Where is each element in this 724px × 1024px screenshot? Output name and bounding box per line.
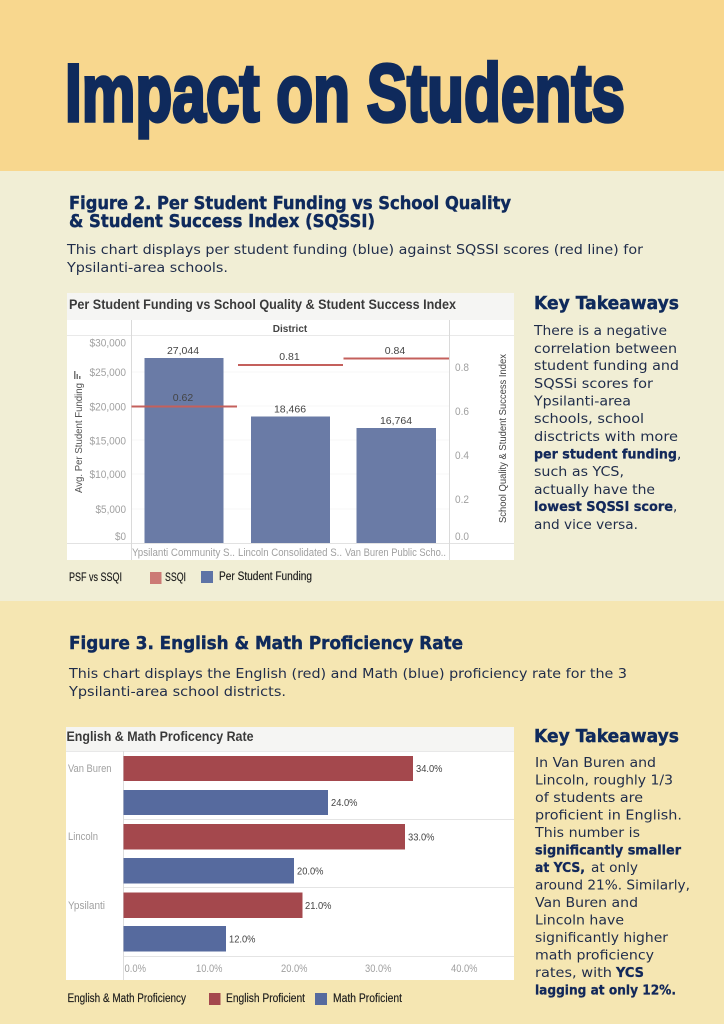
legend: figure 2: SSQI [165, 572, 186, 584]
text block: takeaways figure 2: , [673, 499, 677, 515]
right axis ticks: 0.4 [455, 450, 469, 462]
text block: takeaways figure 3: Lincoln have [535, 912, 624, 928]
text block: takeaways figure 3: In Van Buren and [535, 755, 656, 771]
legend: figure 3: English & Math Proficiency [68, 993, 186, 1005]
axis ticks: 10.0% [196, 963, 223, 975]
left axis ticks: $20,000 [90, 402, 126, 414]
heading: key takeaways figure 2: Key Takeaways [534, 293, 679, 314]
English bars [124, 756, 413, 918]
text block: takeaways figure 3: Lincoln, roughly 1/3 [535, 772, 673, 788]
text block: takeaways figure 3: proficient in English. [535, 808, 682, 824]
legend: figure 2: Per Student Funding [219, 571, 312, 583]
right axis ticks: 0.8 [455, 362, 469, 374]
right axis ticks: 0.2 [455, 494, 469, 506]
category labels: Van Buren Public Scho.. [345, 547, 446, 559]
bar chart: per student funding vs SQSSI [67, 293, 514, 560]
text block: takeaways figure 2 [533, 323, 681, 533]
text block: takeaways figure 2: correlation between [534, 341, 677, 357]
text block: takeaways figure 2: and vice versa. [534, 517, 638, 533]
text block: takeaways figure 3: YCS [615, 965, 644, 981]
bar chart: english and math proficiency [66, 727, 514, 980]
text block: takeaways figure 3: of students are [535, 790, 643, 806]
text block: takeaways figure 2: such as YCS, [534, 464, 624, 480]
text block: takeaways figure 3: lagging at only 12%. [535, 982, 676, 998]
text block: takeaways figure 2: Ypsilanti-area [533, 394, 631, 410]
text block: figure 3 description: This chart displays the English (red) and Math (blue) proficiency rate for the 3 [68, 666, 627, 682]
left axis ticks: $25,000 [90, 367, 126, 379]
right axis ticks: 0.0 [455, 531, 469, 543]
chart title: English & Math Proficency Rate [66, 729, 254, 744]
panel: figure 3 background [0, 601, 724, 1024]
axis title: left: Avg. Per Student Funding [73, 383, 85, 493]
text block: takeaways figure 2: disctricts with more [534, 429, 678, 445]
district labels [68, 763, 112, 912]
category labels [132, 547, 446, 559]
legend: figure 3: English Proficient [226, 993, 306, 1005]
value labels: 20.0% [297, 866, 324, 878]
axis ticks: 40.0% [451, 963, 478, 975]
text block: takeaways figure 3: math proficiency [535, 948, 654, 964]
left axis ticks: $0 [115, 531, 126, 543]
legend: figure 2: PSF vs SSQI [69, 572, 122, 584]
text block: takeaways figure 3: rates, with [535, 965, 612, 981]
text block: figure 2 description: Ypsilanti-area schools. [66, 260, 228, 276]
text block: takeaways figure 2: schools, school [534, 411, 644, 427]
data labels: 0.62 [173, 392, 193, 404]
right axis ticks [455, 362, 469, 543]
data labels: 18,466 [274, 404, 306, 416]
data labels: 27,044 [167, 345, 199, 357]
chart title: Per Student Funding vs School Quality & Student Success Index [69, 297, 456, 312]
left axis ticks: $30,000 [90, 338, 126, 350]
text block: takeaways figure 2: lowest SQSSI score [534, 499, 673, 515]
district labels: Ypsilanti [68, 900, 105, 912]
left axis ticks: $15,000 [90, 436, 126, 448]
text block: takeaways figure 3: at only [591, 860, 638, 876]
heading: figure 3: Figure 3. English & Math Proficiency Rate [69, 634, 463, 654]
value labels: 12.0% [229, 934, 256, 946]
column header: District [273, 324, 308, 335]
axis ticks: 20.0% [281, 963, 308, 975]
category labels: Ypsilanti Community S.. [132, 547, 235, 559]
Math bars [124, 790, 328, 952]
value labels: 24.0% [331, 797, 358, 809]
axis ticks: 0.0% [124, 963, 146, 975]
text block: takeaways figure 3: around 21%. Similarly, [535, 878, 690, 894]
axis ticks [124, 963, 478, 975]
text block: takeaways figure 2: , [677, 446, 681, 462]
value labels: 34.0% [416, 763, 442, 775]
text block: figure 3 description [68, 666, 627, 700]
data labels: 16,764 [380, 415, 412, 427]
legend: figure 2 [69, 571, 312, 584]
legend: figure 3 [68, 993, 403, 1005]
heading: figure 2: & Student Success Index (SQSSI) [69, 212, 375, 232]
text block: takeaways figure 3: Van Buren and [535, 895, 638, 911]
text block: takeaways figure 3: at YCS, [535, 860, 585, 876]
text block: takeaways figure 3 [534, 755, 690, 998]
text block: figure 2 description: This chart displays per student funding (blue) against SQSSI scores (red line) for [66, 242, 643, 258]
text block: figure 2 description [66, 242, 643, 276]
text block: takeaways figure 3: significantly smaller [535, 842, 681, 858]
text block: takeaways figure 2: There is a negative [533, 323, 667, 339]
text block: takeaways figure 2: student funding and [534, 358, 679, 374]
text block: takeaways figure 2: actually have the [534, 482, 655, 498]
axis title: right: School Quality & Student Success Index [497, 353, 509, 523]
SSQI lines [132, 358, 449, 406]
district labels: Van Buren [68, 763, 112, 775]
text block: takeaways figure 3: This number is [534, 825, 640, 841]
text block: figure 3 description: Ypsilanti-area school districts. [68, 684, 286, 700]
axis ticks: 30.0% [365, 963, 392, 975]
data labels: 0.81 [279, 351, 300, 363]
text block: takeaways figure 3: significantly higher [535, 930, 668, 946]
heading: figure 2 [69, 194, 512, 232]
district labels: Lincoln [68, 831, 98, 843]
data labels [167, 345, 412, 427]
category labels: Lincoln Consolidated S.. [238, 547, 342, 559]
left axis ticks: $5,000 [96, 504, 126, 516]
panel: title banner [0, 0, 724, 171]
right axis ticks: 0.6 [455, 406, 469, 418]
icon: sort indicator [74, 371, 80, 379]
bars [144, 358, 436, 543]
value labels: 33.0% [408, 832, 434, 844]
value labels [229, 763, 442, 946]
heading: key takeaways figure 3: Key Takeaways [534, 726, 679, 747]
legend: figure 3: Math Proficient [333, 993, 403, 1005]
left axis ticks: $10,000 [90, 469, 126, 481]
text block: takeaways figure 2: per student funding [534, 446, 677, 462]
panel: figure 2 background [0, 171, 724, 601]
value labels: 21.0% [305, 900, 332, 912]
data labels: 0.84 [385, 345, 405, 357]
left axis ticks [90, 338, 126, 543]
heading: figure 2: Figure 2. Per Student Funding vs School Quality [69, 194, 512, 214]
text block: takeaways figure 2: SQSSi scores for [534, 376, 653, 392]
